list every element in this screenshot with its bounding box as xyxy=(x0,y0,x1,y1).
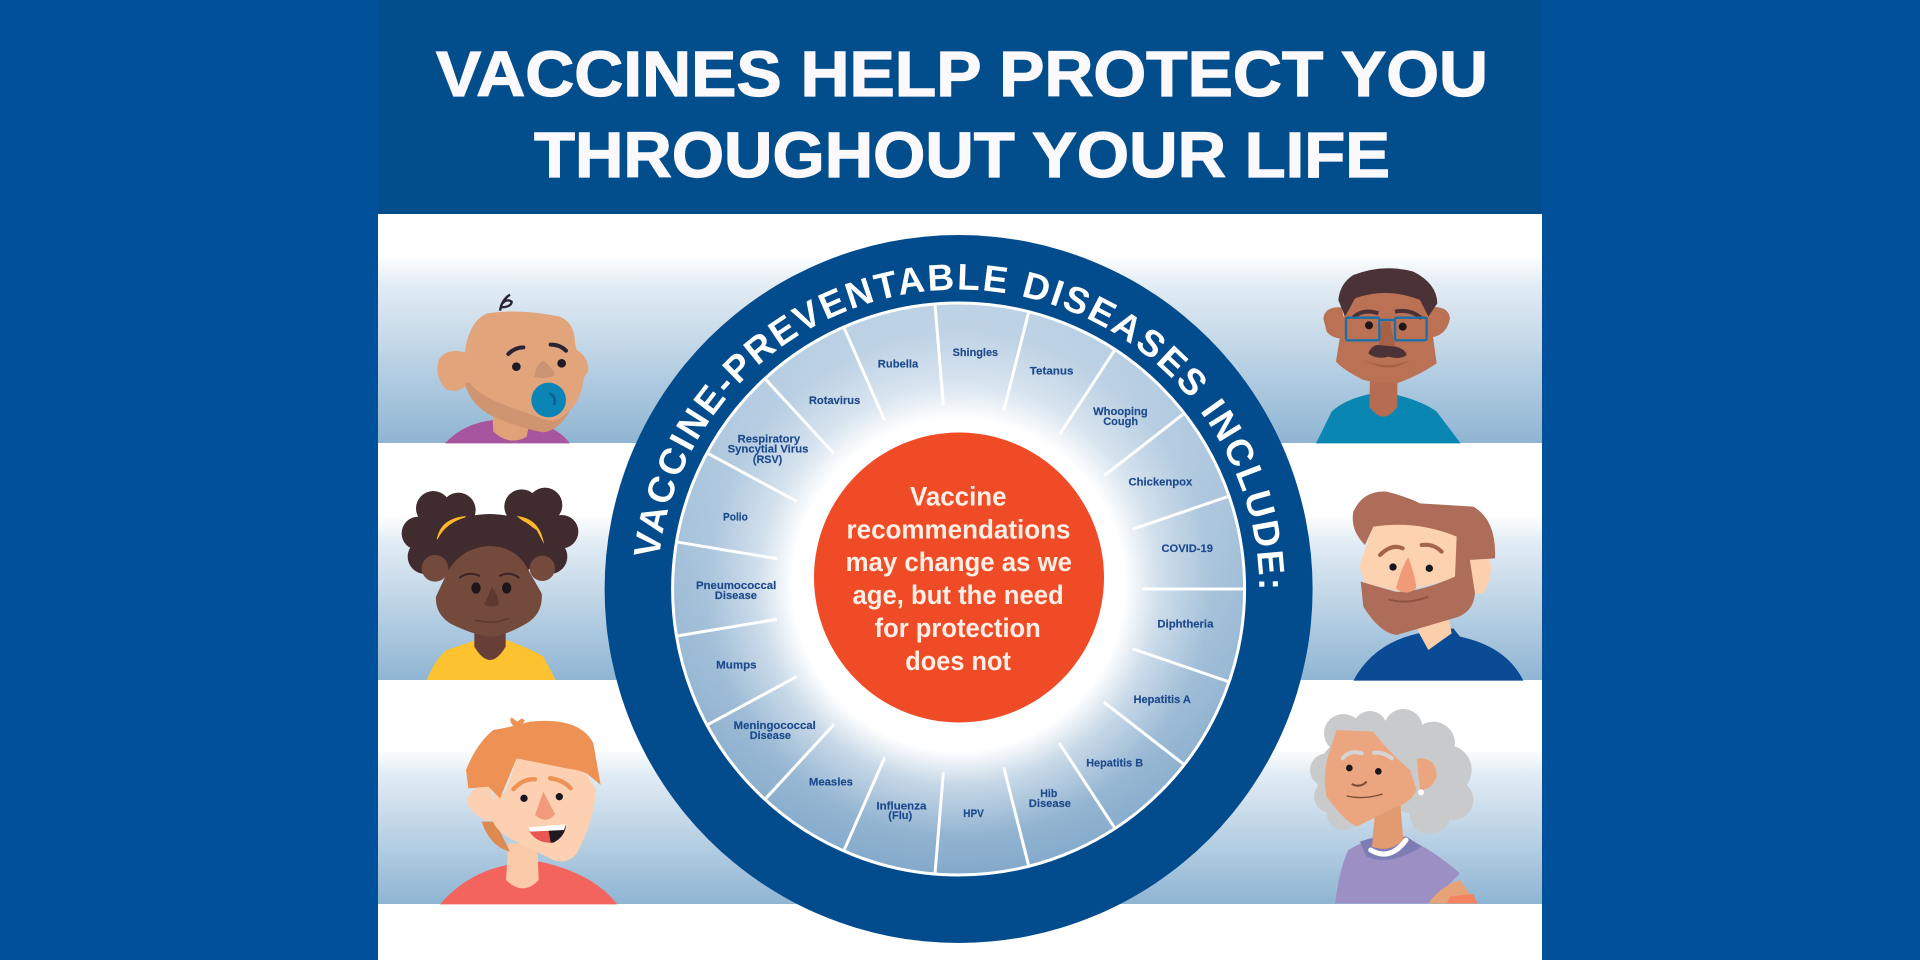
portrait: girl xyxy=(402,488,578,680)
disease labels: Pneumococcal xyxy=(696,580,776,592)
header band xyxy=(378,0,1542,214)
ring heading: VACCINE-PREVENTABLE DISEASES INCLUDE: xyxy=(634,264,1284,587)
vaccine wheel xyxy=(604,235,1313,943)
portrait: grandmother xyxy=(1310,709,1477,903)
title: VACCINES HELP PROTECT YOU xyxy=(436,38,1488,110)
disease labels: Measles xyxy=(809,777,853,789)
portrait: boy xyxy=(440,717,617,904)
disease labels: Respiratory xyxy=(738,434,801,446)
gradient band: bottom xyxy=(378,751,1542,904)
disease labels: Diphtheria xyxy=(1157,619,1214,631)
title: THROUGHOUT YOUR LIFE xyxy=(534,119,1390,191)
portrait: man with glasses xyxy=(1316,268,1461,443)
center message: Vaccine xyxy=(910,482,1006,512)
center red circle xyxy=(814,432,1104,722)
disease labels: Rotavirus xyxy=(809,395,860,407)
disease labels: Disease xyxy=(1029,798,1071,810)
disease labels: Meningococcal xyxy=(734,720,816,732)
center message: does not xyxy=(905,646,1011,676)
disease labels: Rubella xyxy=(878,358,919,370)
disease labels: Hepatitis A xyxy=(1134,694,1191,706)
disease labels: COVID-19 xyxy=(1162,543,1213,555)
disease labels: (Flu) xyxy=(888,810,913,822)
disease labels: Hib xyxy=(1040,788,1058,800)
disease labels: Shingles xyxy=(953,347,998,359)
portrait: baby xyxy=(437,295,588,443)
disease labels: (RSV) xyxy=(753,454,783,466)
disease labels: HPV xyxy=(963,808,984,820)
wheel disc xyxy=(673,303,1245,875)
disease labels: Tetanus xyxy=(1030,366,1073,378)
disease labels: Polio xyxy=(723,512,748,524)
disease labels: Influenza xyxy=(876,800,927,812)
portrait: bearded man xyxy=(1353,492,1523,681)
center message: age, but the need xyxy=(852,580,1064,610)
disease labels: Disease xyxy=(715,590,757,602)
sector spokes xyxy=(676,304,1245,874)
center message: may change as we xyxy=(846,547,1072,577)
disease labels: Hepatitis B xyxy=(1086,758,1143,770)
outer navy ring xyxy=(605,235,1313,943)
disease labels: Whooping xyxy=(1093,406,1148,418)
gradient band: top xyxy=(378,258,1542,443)
white central glow xyxy=(675,305,1243,873)
gradient band: middle xyxy=(378,518,1542,680)
disease labels: Syncytial Virus xyxy=(728,444,808,456)
disease labels: Disease xyxy=(750,730,791,742)
center message: for protection xyxy=(875,613,1041,643)
disease labels xyxy=(696,347,1214,822)
center message: recommendations xyxy=(846,514,1070,544)
title xyxy=(436,38,1488,191)
disease labels: Mumps xyxy=(716,660,757,672)
white panel xyxy=(378,214,1542,960)
disease labels: Chickenpox xyxy=(1128,477,1193,489)
disease labels: Cough xyxy=(1103,416,1138,428)
center message xyxy=(846,482,1072,676)
